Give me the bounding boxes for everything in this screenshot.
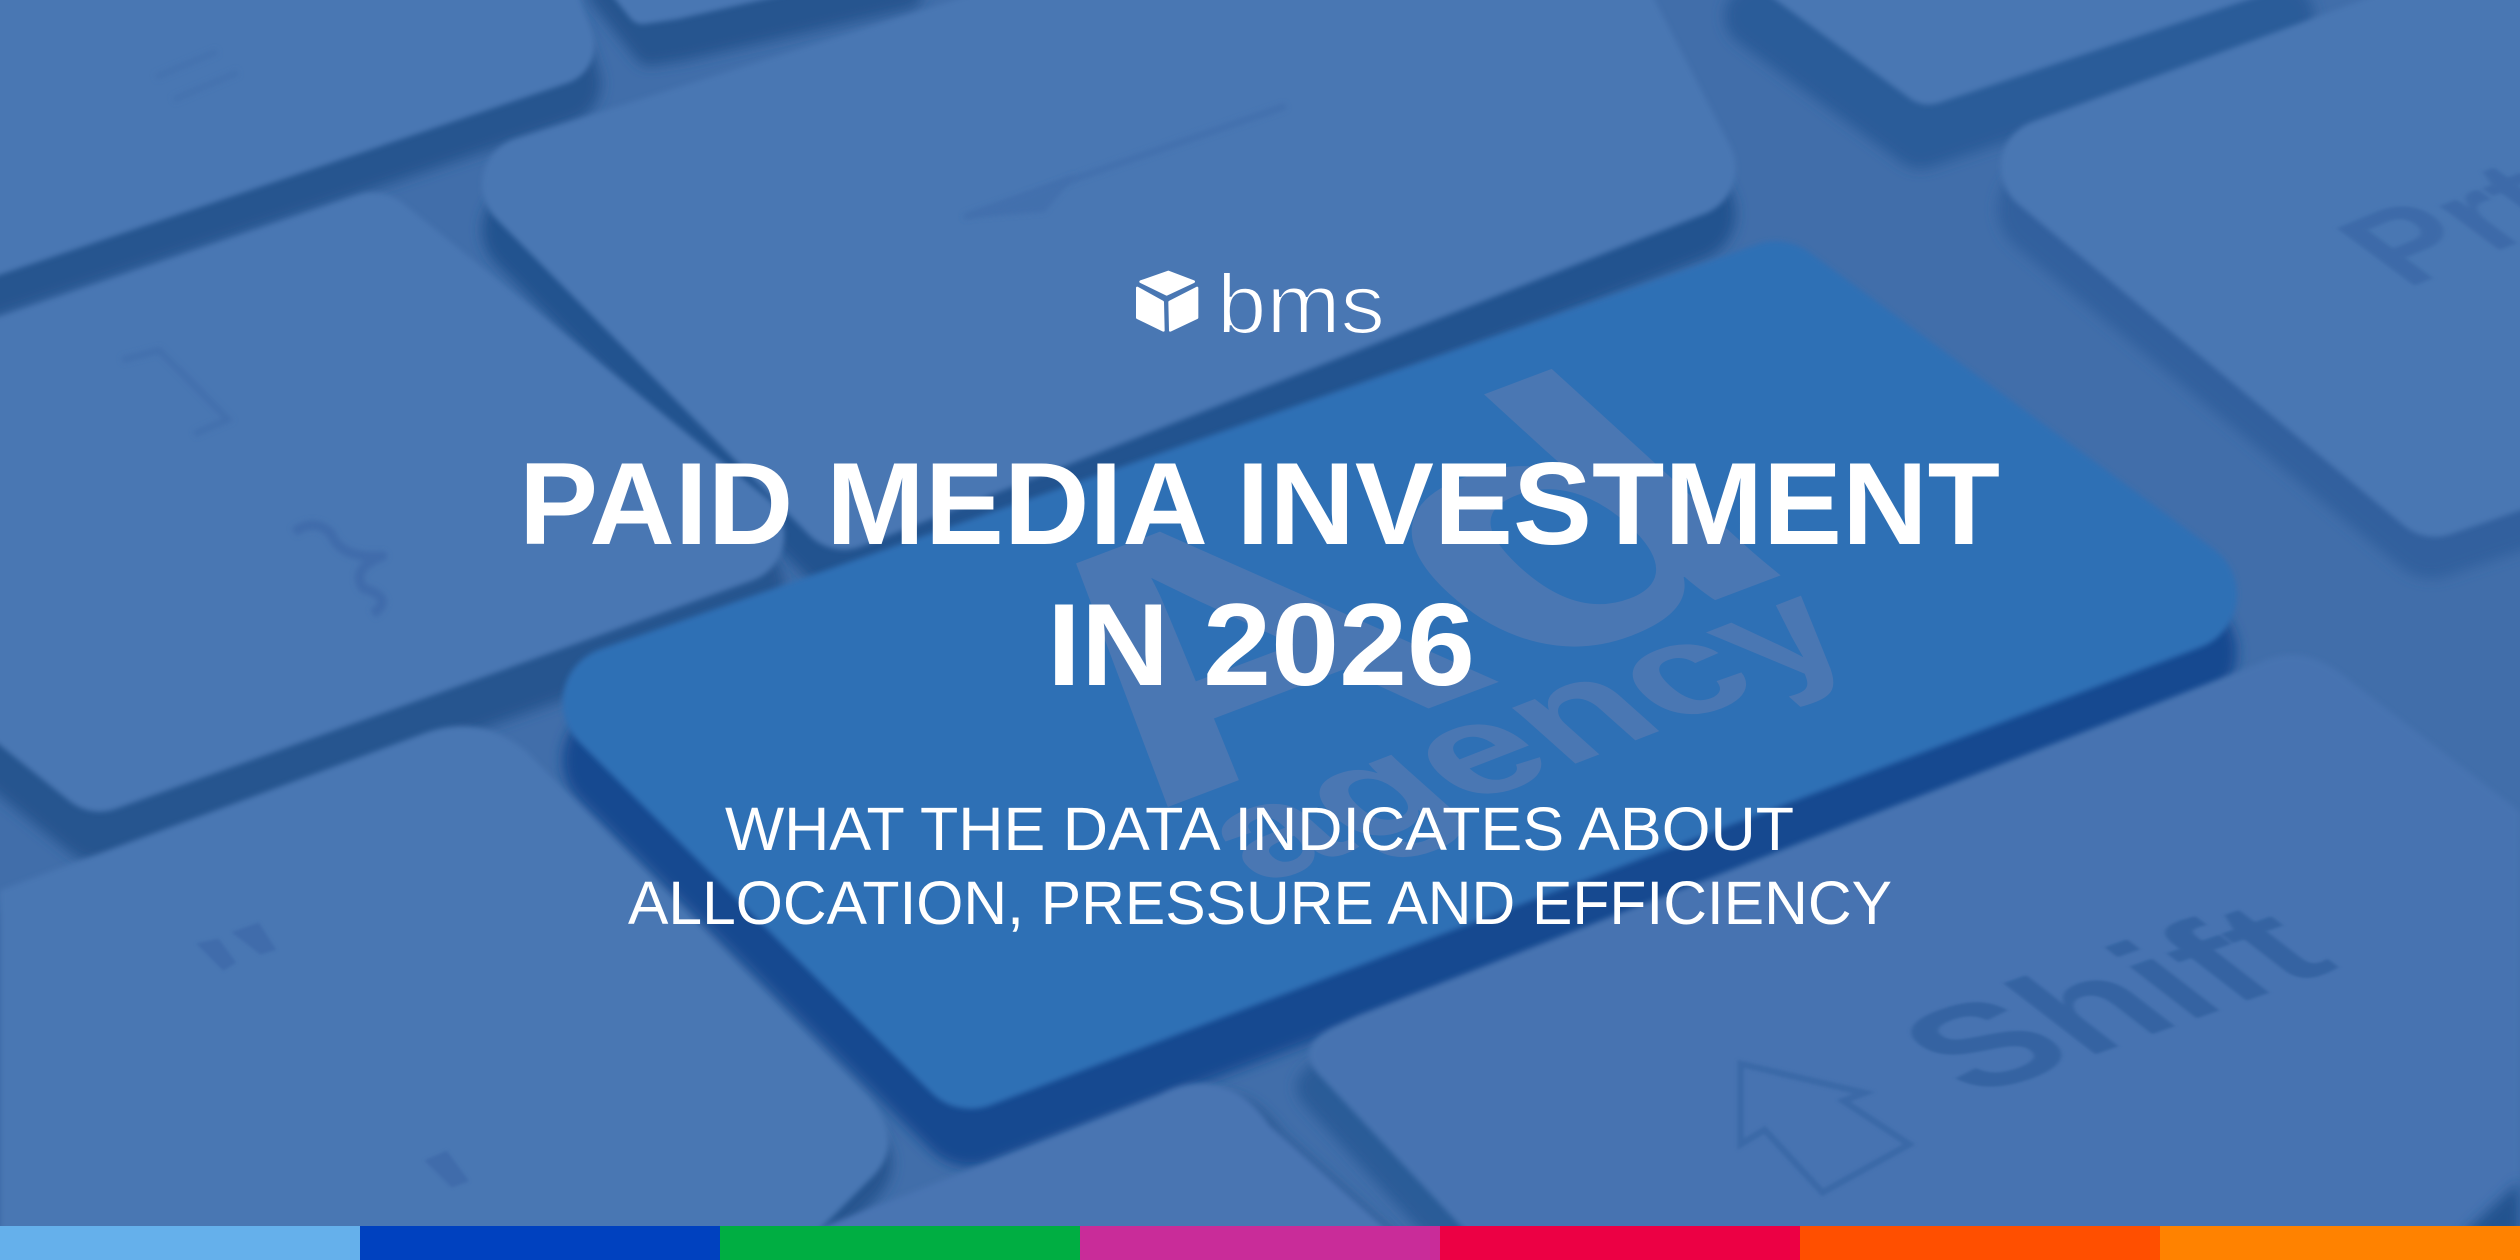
key: top centre with arrow (530, 0, 1687, 546)
ad legend: Ad (873, 305, 1880, 873)
agency legend: agency (1154, 555, 1890, 908)
legend: brace (294, 525, 382, 614)
logo: bms (1137, 257, 1385, 351)
title line 1: PAID MEDIA INVESTMENT (519, 438, 2000, 569)
legend: equals (156, 51, 238, 100)
key: top left (0, 0, 561, 292)
colour bar (0, 1226, 2520, 1260)
subtitle line 2: ALLOCATION, PRESSURE AND EFFICIENCY (628, 869, 1892, 937)
shift legend: Shift (1859, 878, 2368, 1119)
legend: bracket (122, 350, 228, 434)
key: bottom small (824, 1082, 1390, 1226)
key: top right narrow (1757, 0, 2290, 137)
subtitle (628, 795, 1892, 937)
key: right with Prt legend (2046, 0, 2520, 530)
legend: arrow (964, 106, 1286, 217)
icon: cube (1137, 272, 1197, 330)
key: shift (1296, 655, 2520, 1254)
key: top small (598, 0, 906, 50)
key: left middle with bracket legends (0, 241, 736, 815)
subtitle line 1: WHAT THE DATA INDICATES ABOUT (725, 795, 1794, 863)
title (519, 438, 2000, 710)
dark corner bottom right (2462, 1180, 2520, 1226)
icon: shift arrow (1741, 1064, 1909, 1192)
key: bottom left with quote legend (0, 726, 892, 1254)
title line 2: IN 2026 (1047, 579, 1475, 710)
legend: quotes (200, 924, 274, 968)
logo wordmark: bms (1217, 257, 1385, 351)
legend: apostrophe mark (427, 1152, 466, 1186)
key: blue agency key (619, 297, 2181, 1111)
